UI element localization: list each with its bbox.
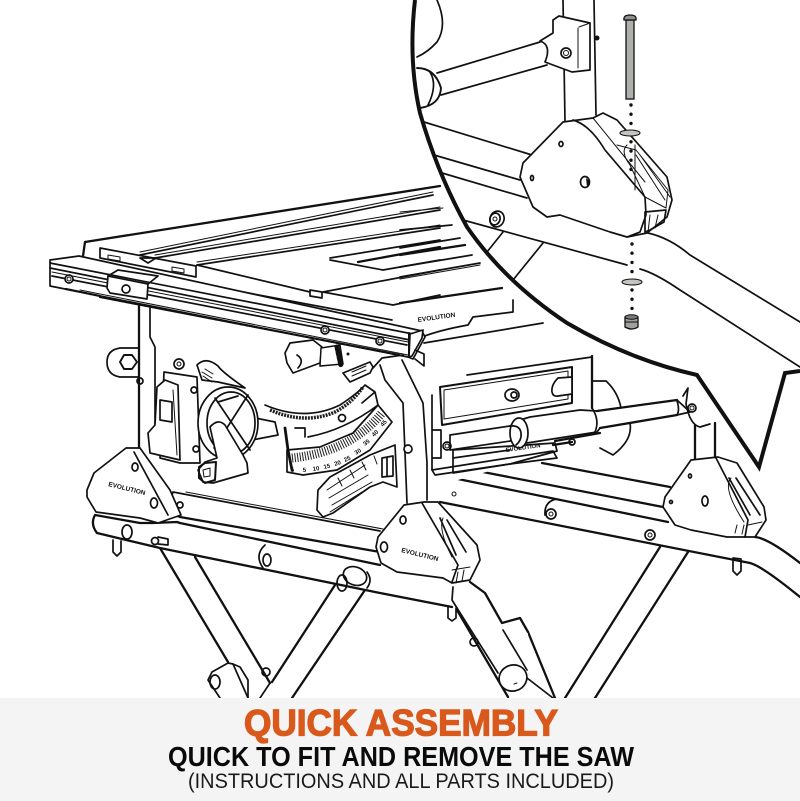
foot plate: left [87,448,181,523]
saw body [107,305,630,520]
switch box [148,359,200,463]
callout: magnified inset [412,0,800,467]
scale numbers [291,419,389,474]
logo: lower body: EVOLUTION [505,443,541,454]
frame rails [424,122,800,367]
scale numbers: 5 [291,468,295,474]
stand legs [160,547,688,698]
logo: centre plate: EVOLUTION [401,547,439,563]
height knob [285,340,403,382]
saw table top [83,186,543,345]
foot plate: centre [376,502,480,583]
scale numbers: 5 [303,468,307,474]
logo: table: EVOLUTION [417,312,456,324]
scale numbers: 25 [343,455,353,464]
foot plate: right [663,457,766,537]
scale numbers: 30 [354,448,363,457]
arm and bracket [417,16,590,108]
upper washer [620,130,640,136]
arm tube to rear post [432,388,715,475]
lock nut [625,315,638,329]
subheading: QUICK TO FIT AND REMOVE THE SAW [168,741,634,772]
bevel lever [317,445,397,517]
rear post [563,0,600,122]
lower washer [622,279,642,285]
rear stand rails [440,463,800,597]
dotted assembly line [631,105,632,312]
tilt scale arc [265,385,392,475]
note: (INSTRUCTIONS AND ALL PARTS INCLUDED) [188,770,614,793]
logo: left plate: EVOLUTION [108,481,146,497]
scale numbers: 45 [380,419,389,428]
scale numbers: 15 [323,464,332,471]
triangular plate [520,113,672,237]
scale numbers: 40 [371,429,381,438]
scale numbers: 20 [334,460,343,468]
hand wheel [197,361,278,483]
heading: QUICK ASSEMBLY [244,702,558,744]
background blob [417,0,442,57]
caption band [0,698,800,801]
scale numbers: 10 [312,466,321,473]
pivot bolt [488,209,506,229]
exploded bolt [624,15,636,99]
mitre gauge rail [50,256,425,366]
scale numbers: 35 [363,438,372,448]
front stand rail [93,492,456,621]
callout outline [412,0,800,467]
table saw stand [50,186,800,698]
